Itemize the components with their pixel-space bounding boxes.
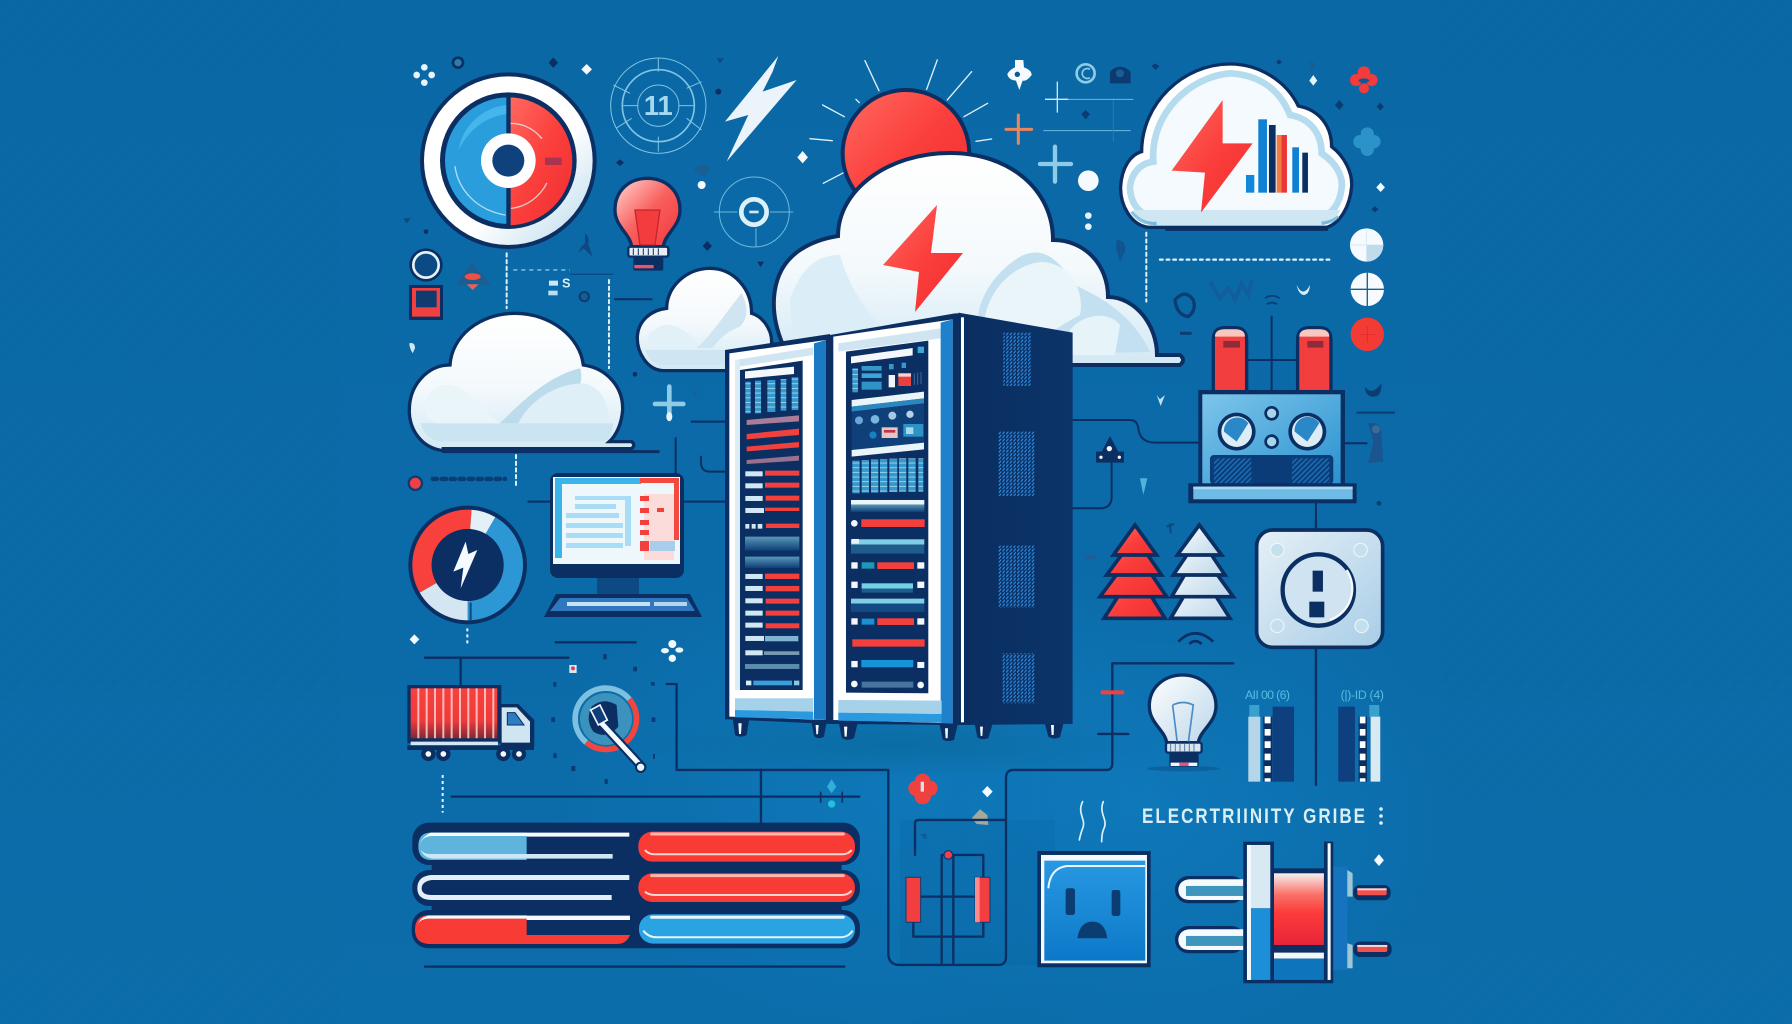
- bar row 3 right: [639, 914, 855, 944]
- network node: [1096, 436, 1124, 463]
- small diamond and node marker: [821, 779, 842, 808]
- right prongs: [1353, 885, 1392, 957]
- outlet with exclamation: [1257, 530, 1383, 647]
- red towers: [1212, 326, 1333, 392]
- dashed connector lines and labels: [507, 253, 613, 487]
- red flower and grey marker: [908, 774, 993, 825]
- small triangle marker: [456, 262, 491, 290]
- bar chart: [1246, 119, 1308, 193]
- film strip columns right: [1338, 688, 1384, 782]
- wrench dial: [551, 654, 655, 784]
- small decorative marks upper left: [403, 57, 808, 398]
- right cabinet: [830, 313, 960, 725]
- status dots column: [1335, 100, 1385, 351]
- film strip columns left: AII 00 (6): [1245, 688, 1290, 702]
- computer monitor: [544, 473, 702, 617]
- power plug: [1175, 842, 1392, 983]
- side panel: [958, 313, 1073, 725]
- thin reticle icon: [714, 177, 793, 247]
- connecting wires: [425, 299, 1367, 967]
- circuit diagram: "6: [921, 833, 927, 840]
- white lightning bolt: [725, 56, 797, 162]
- cross marker: [655, 387, 683, 421]
- progress bars panel: [412, 823, 860, 948]
- title text: ELECRTRIINITY GRIBE: [1142, 805, 1365, 829]
- bar row 1 left: [418, 833, 630, 861]
- small cloud: [637, 268, 772, 371]
- thin target dial with 11: 11: [644, 90, 673, 121]
- red flower icon: [1350, 66, 1378, 93]
- white light bulb: [1147, 675, 1220, 771]
- rack legs: [733, 718, 1064, 741]
- delivery truck: [407, 685, 534, 759]
- main cloud with lightning: [774, 153, 1183, 365]
- transformer: [1188, 326, 1357, 503]
- decorative marks upper right: [1006, 59, 1317, 230]
- blue wall socket: [1037, 802, 1151, 967]
- bar row 1 right: [638, 832, 855, 862]
- circuit diagram: [906, 820, 1005, 963]
- lightning bolt: [883, 205, 963, 312]
- circular lightning gauge: [408, 506, 527, 624]
- bar row 2 left: [417, 875, 629, 900]
- red dot and dotted line: [409, 477, 505, 490]
- big split gauge: [420, 72, 597, 249]
- blue puzzle blob: [1353, 127, 1381, 156]
- lightning bolt: [1172, 100, 1253, 213]
- top cloud with lightning and bar chart: [1121, 64, 1352, 229]
- film strip columns right: (|)-ID (4): [1341, 688, 1384, 702]
- red light bulb: [615, 178, 680, 271]
- marks above transformer: [1116, 240, 1395, 506]
- left cabinet: [725, 334, 830, 724]
- bar row 3 left: [415, 915, 630, 944]
- dashed connectors right: [1146, 233, 1330, 302]
- decorative marks lower left: [410, 628, 683, 813]
- bar row 2 right: [638, 873, 855, 902]
- left small icons: ring and red box: [409, 248, 443, 320]
- thin target dial with 11: [611, 58, 706, 153]
- sun: [810, 60, 992, 217]
- red and white trees: [1085, 523, 1233, 644]
- left cloud: [409, 313, 658, 452]
- server racks: [725, 313, 1073, 741]
- left prongs: [1175, 876, 1245, 953]
- film strip columns left: [1245, 688, 1294, 782]
- dashed connector lines and labels: S: [562, 277, 570, 291]
- keyboard base: [544, 594, 702, 617]
- red and navy dashes: [1103, 686, 1122, 698]
